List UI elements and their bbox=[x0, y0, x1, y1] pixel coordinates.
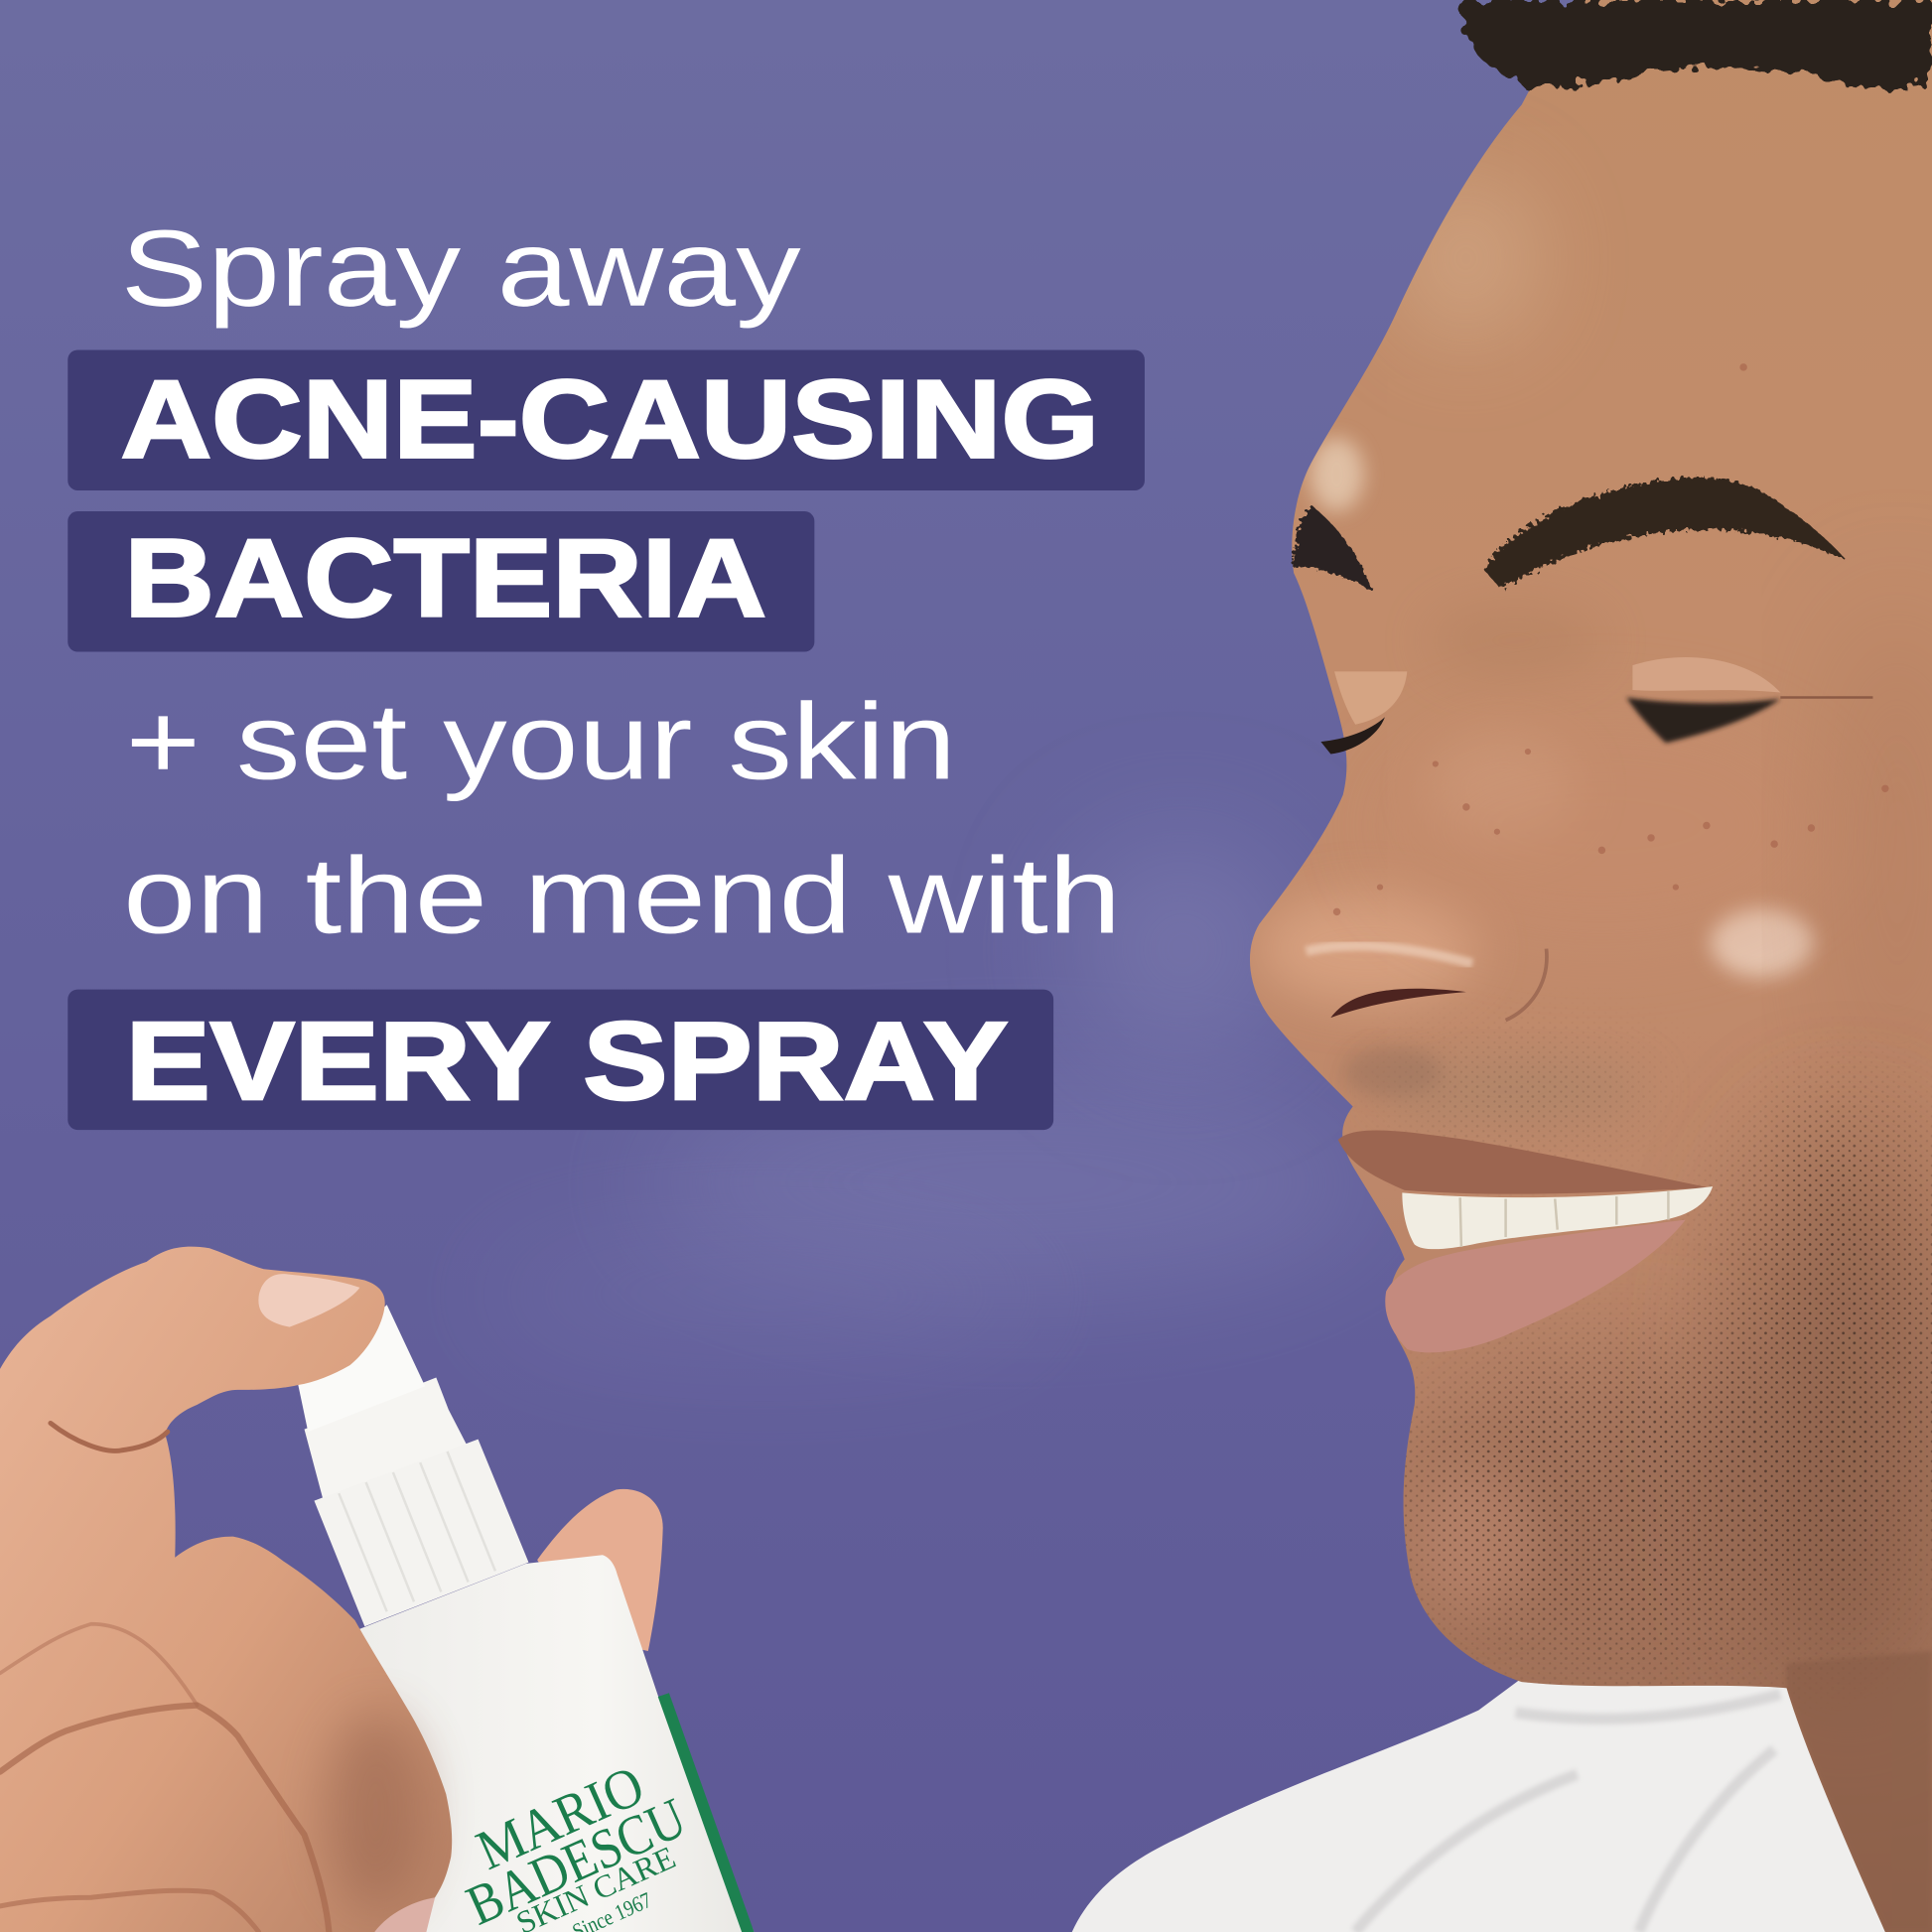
upper lip bbox=[1338, 1130, 1709, 1194]
highlight: BACTERIA: BACTERIA bbox=[124, 516, 766, 640]
teeth bbox=[1402, 1186, 1713, 1249]
far eye bbox=[1320, 671, 1407, 755]
near eye bbox=[1626, 657, 1872, 743]
man's face bbox=[1232, 0, 1932, 1932]
finger creases bbox=[0, 1423, 329, 1932]
green label stripe bbox=[658, 1693, 755, 1932]
brand text: MARIO bbox=[468, 1754, 653, 1882]
face shading bbox=[1232, 173, 1932, 1932]
finger behind bottle bbox=[537, 1489, 663, 1651]
hand and fingers bbox=[0, 1247, 452, 1932]
freckles bbox=[1333, 363, 1889, 915]
pump neck bbox=[305, 1378, 469, 1503]
lower lip bbox=[1385, 1220, 1686, 1352]
hand bbox=[0, 1247, 452, 1932]
near eyebrow bbox=[1483, 478, 1846, 589]
nostril and nose crease bbox=[1307, 945, 1547, 1021]
line: + set your skin: + set your skin bbox=[126, 681, 956, 802]
highlight: BACTERIA bbox=[68, 511, 814, 652]
face skin bbox=[1250, 0, 1932, 1932]
headline bbox=[68, 208, 1145, 1130]
bottle body bbox=[359, 1555, 755, 1932]
highlight: EVERY SPRAY bbox=[68, 990, 1053, 1130]
ring finger nail bbox=[374, 1897, 435, 1932]
far eyebrow bbox=[1293, 505, 1373, 592]
bottle collar bbox=[314, 1440, 528, 1626]
spray mist bbox=[469, 838, 1380, 1368]
line: on the mend with: on the mend with bbox=[123, 835, 1121, 956]
hair bbox=[1461, 0, 1932, 90]
thumb nail bbox=[258, 1274, 359, 1327]
spray bottle bbox=[298, 1305, 755, 1932]
highlight: EVERY SPRAY: EVERY SPRAY bbox=[126, 999, 1008, 1123]
shirt bbox=[1072, 1657, 1891, 1932]
nozzle bbox=[298, 1305, 425, 1432]
highlight: ACNE-CAUSING: ACNE-CAUSING bbox=[121, 356, 1099, 481]
line: Spray away: Spray away bbox=[121, 208, 801, 330]
knuckle shading bbox=[327, 1713, 425, 1910]
